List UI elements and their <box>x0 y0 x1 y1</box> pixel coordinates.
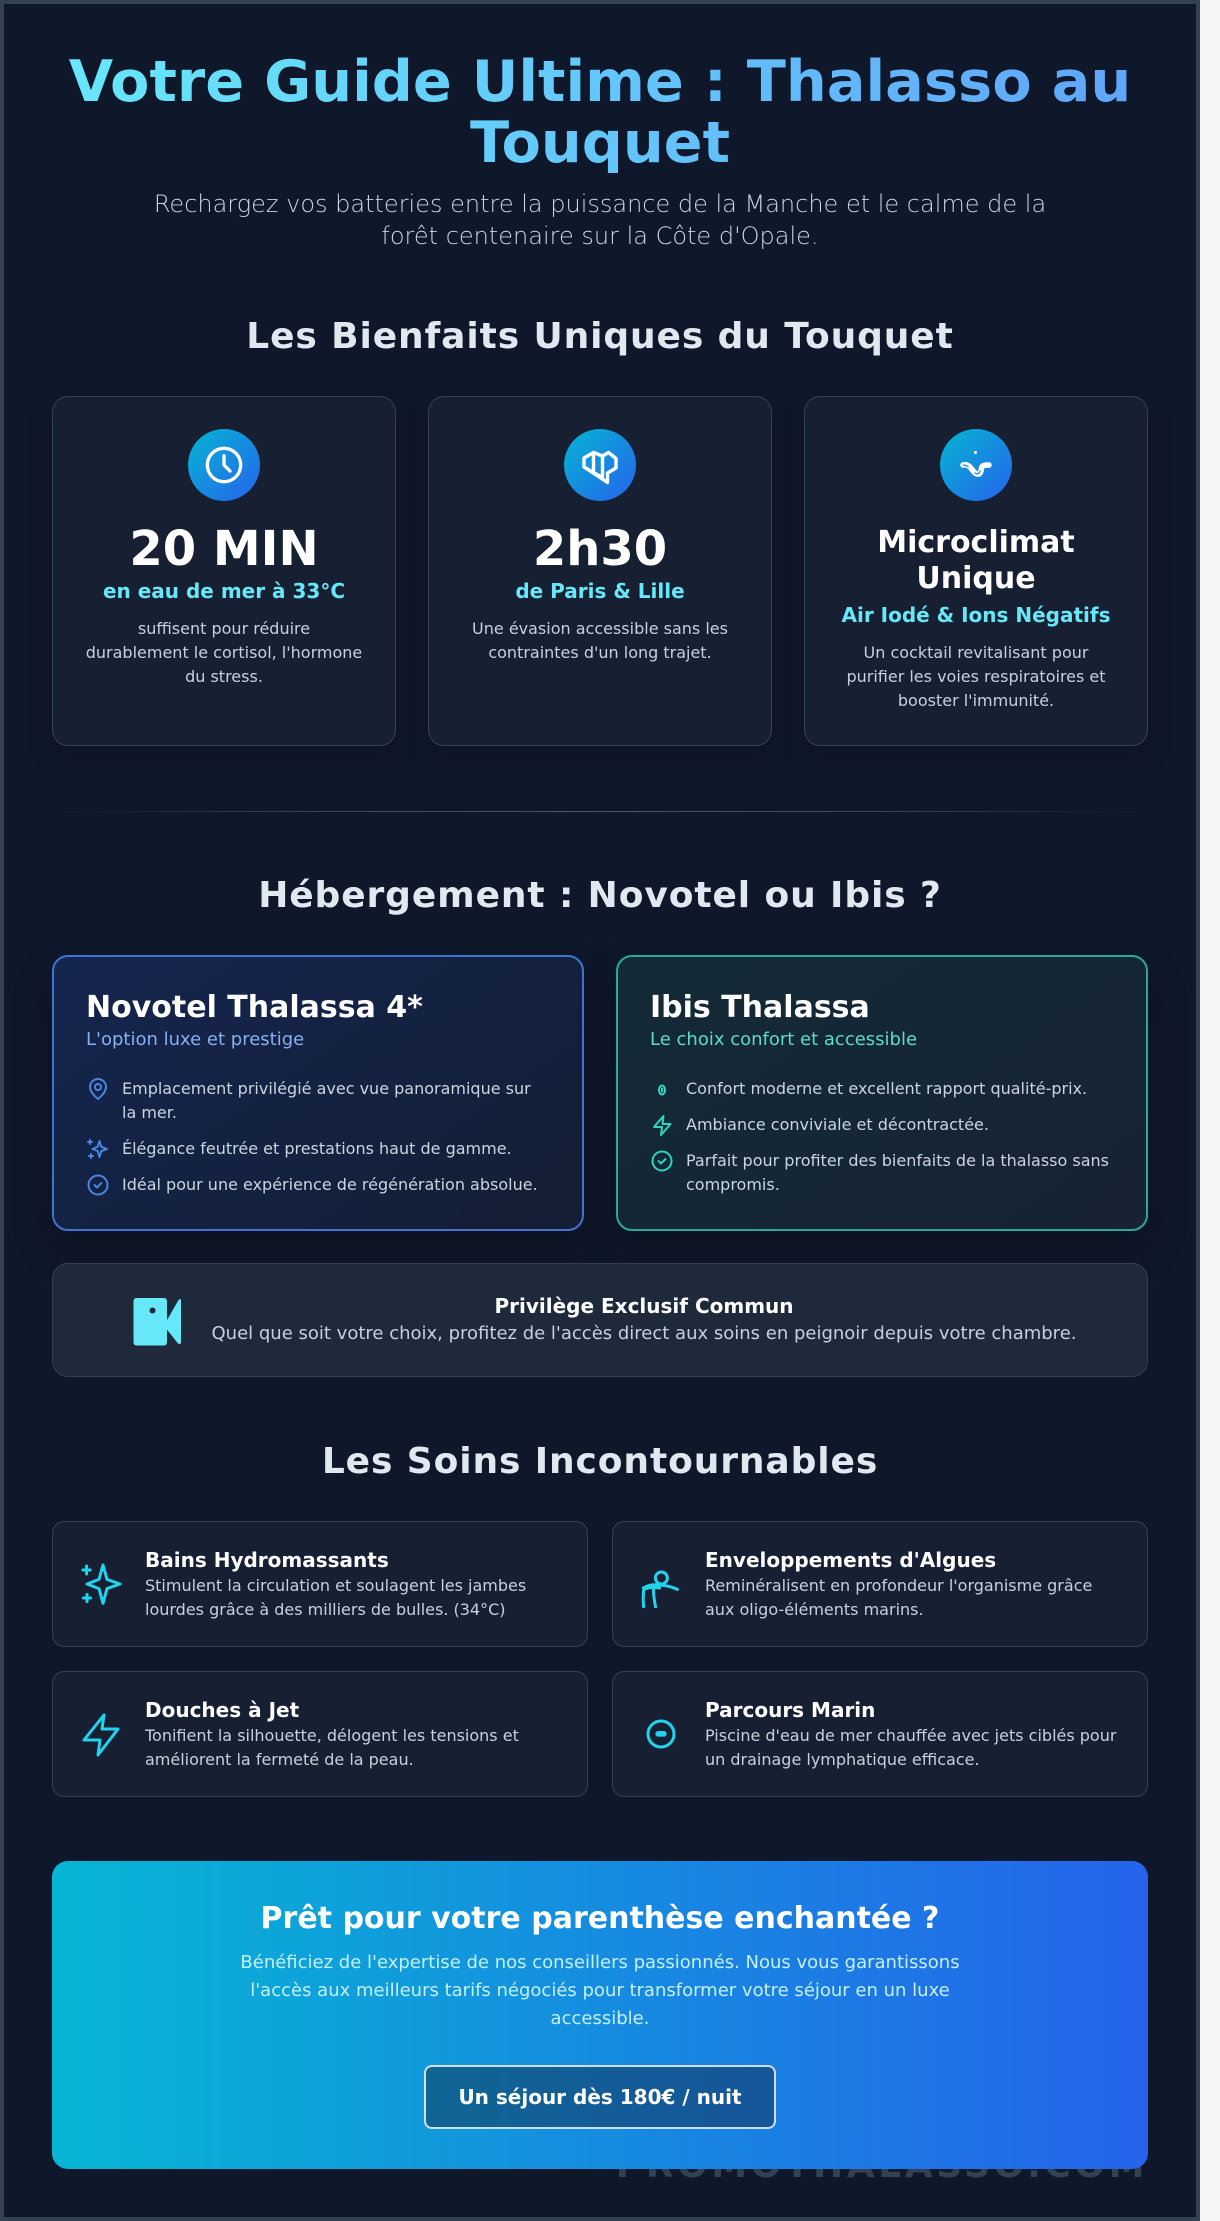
feature: elegance: Élégance feutrée et prestations haut de gamme. <box>122 1139 512 1158</box>
title: Votre Guide Ultime : Thalasso au <box>69 48 1131 115</box>
feature: location: la mer. <box>122 1103 177 1122</box>
hotel tagline: Le choix confort et accessible <box>650 1029 917 1050</box>
hotel name: Ibis Thalassa <box>650 990 870 1025</box>
soin text: aux oligo-éléments marins. <box>705 1600 924 1619</box>
soin text: améliorent la fermeté de la peau. <box>145 1750 414 1769</box>
stat description: Une évasion accessible sans les <box>472 619 728 638</box>
panel: 2h30 <box>428 396 772 746</box>
title: Touquet <box>470 109 730 176</box>
soin title: Douches à Jet <box>145 1698 299 1722</box>
panel: 20 min <box>52 396 396 746</box>
stat description: booster l'immunité. <box>898 691 1054 710</box>
stat value: 2h30 <box>533 521 667 577</box>
callout text <box>212 1294 1076 1344</box>
panel: privilège commun <box>52 1263 1148 1377</box>
stat description: purifier les voies respiratoires et <box>846 667 1106 686</box>
panel: enveloppements <box>612 1521 1148 1647</box>
heading: hébergement: Hébergement : Novotel ou Ibis ? <box>258 875 942 916</box>
feature: comfort: Confort moderne et excellent rapport qualité-prix. <box>686 1079 1087 1098</box>
soin text: un drainage lymphatique efficace. <box>705 1750 980 1769</box>
panel: parcours <box>612 1671 1148 1797</box>
hotel name: Novotel Thalassa 4* <box>86 990 423 1025</box>
stat description: durablement le cortisol, l'hormone <box>86 643 362 662</box>
cta button: Un séjour dès 180€ / nuit <box>458 2085 742 2109</box>
soin text <box>705 1726 1116 1769</box>
subtitle <box>154 190 1046 250</box>
icon: video <box>134 1298 181 1346</box>
soin text <box>144 1726 519 1769</box>
callout heading: Privilège Exclusif Commun <box>494 1294 794 1318</box>
feature: location: Emplacement privilégié avec vue panoramique sur <box>122 1079 531 1098</box>
cta heading: Prêt pour votre parenthèse enchantée ? <box>261 1901 939 1936</box>
stat description: contraintes d'un long trajet. <box>488 643 712 662</box>
icon: circle minus <box>646 1720 676 1748</box>
stat title <box>877 525 1075 596</box>
stat value: 20 MIN <box>129 521 319 577</box>
soin text: Piscine d'eau de mer chauffée avec jets ciblés pour <box>705 1726 1116 1745</box>
stat title: Unique <box>916 561 1036 596</box>
icon: bolt <box>82 1714 120 1756</box>
soin text: Reminéralisent en profondeur l'organisme grâce <box>705 1576 1092 1595</box>
stat description: Un cocktail revitalisant pour <box>864 643 1088 662</box>
icon: clock <box>188 429 260 501</box>
stat description: du stress. <box>185 667 263 686</box>
divider <box>52 811 1148 812</box>
panel: Ibis <box>616 955 1148 1231</box>
heading: bienfaits: Les Bienfaits Uniques du Touquet <box>246 316 954 357</box>
feature: value <box>652 1150 1109 1194</box>
soin text: lourdes grâce à des milliers de bulles. (34°C) <box>145 1600 506 1619</box>
panel: Novotel <box>52 955 584 1231</box>
panel: bains <box>52 1521 588 1647</box>
subtitle: Rechargez vos batteries entre la puissance de la Manche et le calme de la <box>154 190 1046 218</box>
panel: douches <box>52 1671 588 1797</box>
icon: person <box>642 1570 679 1608</box>
stat description <box>86 619 362 686</box>
icon: sparkles <box>82 1564 122 1605</box>
feature: location <box>89 1078 531 1122</box>
feature: ambiance: Ambiance conviviale et décontractée. <box>686 1115 989 1134</box>
hotel tagline: L'option luxe et prestige <box>86 1029 304 1050</box>
watermark: PROMOTHALASSO.COM <box>616 2145 1148 2186</box>
soin title: Enveloppements d'Algues <box>705 1548 996 1572</box>
soin text <box>145 1576 526 1619</box>
feature: value: Parfait pour profiter des bienfaits de la thalasso sans <box>686 1151 1109 1170</box>
icon: wind <box>940 429 1012 501</box>
subtitle: forêt centenaire sur la Côte d'Opale. <box>381 222 819 250</box>
feature: value: compromis. <box>686 1175 780 1194</box>
stat description <box>846 643 1106 710</box>
cta text: Bénéficiez de l'expertise de nos conseillers passionnés. Nous vous garantissons <box>240 1952 960 1973</box>
panel: microclimat <box>804 396 1148 746</box>
feature: regeneration: Idéal pour une expérience de régénération absolue. <box>122 1175 538 1194</box>
soin text <box>705 1576 1092 1619</box>
stat label: Air Iodé & Ions Négatifs <box>841 603 1110 627</box>
feature list <box>652 1079 1109 1194</box>
stat description <box>472 619 728 662</box>
cta text: accessible. <box>551 2008 649 2029</box>
feature list <box>87 1078 538 1196</box>
cta button <box>424 2065 776 2129</box>
panel: call to action <box>52 1861 1148 2169</box>
soin title: Parcours Marin <box>705 1698 875 1722</box>
cta text: l'accès aux meilleurs tarifs négociés pour transformer votre séjour en un luxe <box>250 1980 950 2001</box>
title <box>52 51 1148 173</box>
stat description: suffisent pour réduire <box>138 619 310 638</box>
stat label: en eau de mer à 33°C <box>103 579 345 603</box>
stat label: de Paris & Lille <box>515 579 685 603</box>
heading: soins: Les Soins Incontournables <box>322 1441 878 1482</box>
cta text <box>240 1952 960 2029</box>
callout body: Quel que soit votre choix, profitez de l'accès direct aux soins en peignoir depuis votre chambre. <box>212 1323 1076 1344</box>
stat title: Microclimat <box>877 525 1075 560</box>
soin text: Tonifient la silhouette, délogent les tensions et <box>145 1726 519 1745</box>
soin text: Stimulent la circulation et soulagent les jambes <box>145 1576 526 1595</box>
soin title: Bains Hydromassants <box>145 1548 389 1572</box>
icon: map <box>564 429 636 501</box>
